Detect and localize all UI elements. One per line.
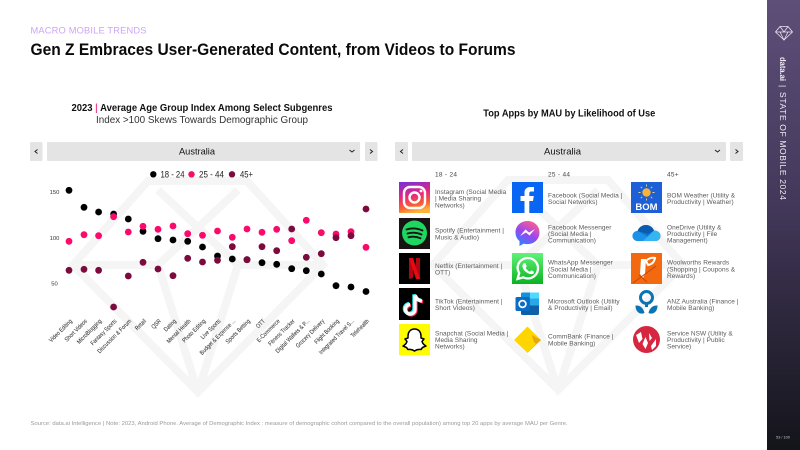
app: Netflix	[399, 253, 502, 284]
app: BOM Weather: BOM	[635, 202, 658, 213]
chart: 45+ series	[66, 206, 369, 310]
app: WhatsApp Messenger: (Social Media |	[548, 266, 592, 273]
eyebrow label: MACRO MOBILE TRENDS	[30, 26, 146, 36]
title: Gen Z Embraces User-Generated Content, from Videos to Forums	[30, 41, 516, 59]
chart: x axis labels: Budget & Expense ...	[199, 318, 238, 357]
right country selector: Australia	[544, 146, 582, 158]
column headers: 25 - 44	[548, 172, 570, 179]
chart heading: Index >100 Skews Towards Demographic Group	[96, 115, 308, 126]
chart: y axis labels: 50	[51, 282, 58, 288]
app: Facebook: Facebook (Social Media |	[548, 192, 623, 199]
chart: y axis labels: 100	[50, 236, 59, 242]
app: Facebook Messenger: Communication)	[548, 238, 596, 245]
chart: y axis labels	[50, 190, 59, 288]
background watermark: left gem	[73, 181, 323, 392]
app: Service NSW: Productivity | Public	[667, 337, 725, 344]
column headers	[435, 172, 679, 179]
chart: x axis labels: Fantasy Sports	[90, 318, 119, 347]
chart: x axis labels: Mental Health	[166, 318, 193, 345]
left country selector: Australia	[179, 146, 216, 158]
app: Service NSW	[633, 326, 733, 353]
app: CommBank	[514, 326, 614, 353]
app: CommBank: Mobile Banking)	[548, 340, 595, 347]
chart: x axis labels	[48, 318, 371, 357]
app: Facebook: Social Networks)	[548, 199, 598, 206]
chart: x axis labels: Grocery Delivery	[295, 318, 326, 350]
app: Instagram	[399, 182, 507, 213]
chart: x axis labels: Dating	[163, 318, 178, 333]
app: BOM Weather: Productivity | Weather)	[667, 199, 734, 206]
app: Spotify: Music & Audio)	[435, 234, 479, 241]
chart heading	[72, 103, 333, 126]
app: BOM Weather: BOM Weather (Utility &	[667, 192, 736, 199]
chart: x axis labels: Sports Betting	[225, 318, 252, 346]
app: OneDrive: Productivity | File	[667, 231, 718, 238]
app: Woolworths Rewards: Woolworths Rewards	[667, 260, 730, 267]
app: Woolworths Rewards: (Shopping | Coupons &	[667, 266, 736, 273]
app: Snapchat: Media Sharing	[435, 337, 478, 344]
column headers: 45+	[667, 172, 679, 179]
chart: x axis labels: MicroBlogging	[76, 318, 104, 346]
app: Facebook	[512, 182, 623, 213]
app: OneDrive	[632, 224, 722, 245]
app: OneDrive: Management)	[667, 238, 708, 245]
chart legend: 18 - 24	[160, 170, 184, 180]
app: Microsoft Outlook: Microsoft Outlook (Utility	[548, 298, 620, 305]
app: Microsoft Outlook: & Productivity | Email)	[548, 305, 613, 312]
chart legend: 45+	[240, 170, 253, 180]
chart: x axis labels: Discussion & Forum	[97, 318, 134, 355]
app: Instagram: Instagram (Social Media	[435, 189, 507, 196]
sidebar title: data.ai	[778, 57, 788, 81]
app: Snapchat	[399, 324, 509, 355]
chart: x axis labels: Fitness Tracker	[268, 318, 297, 348]
left country selector	[30, 142, 378, 161]
app: Spotify	[399, 218, 504, 249]
app: ANZ Australia: ANZ Australia (Finance |	[667, 298, 739, 305]
chart: x axis labels: QSR	[151, 318, 163, 331]
footnote: Source: data.ai Intelligence | Note: 2023, Android Phone. Average of Demographic Index : measure of demographic cohort compared to the overall population) among top 20 apps by average MAU per Genre.	[31, 421, 568, 427]
app: OneDrive: OneDrive (Utility &	[667, 224, 722, 231]
app: Netflix: Netflix (Entertainment |	[435, 263, 502, 270]
chart: x axis labels: E-Commerce	[256, 318, 282, 344]
app: WhatsApp Messenger: Communication)	[548, 273, 596, 280]
right country selector	[395, 142, 743, 161]
chart legend: 25 - 44	[199, 170, 224, 180]
chart: x axis labels: Telehealth	[350, 318, 371, 339]
chart: x axis labels: Video Editing	[48, 318, 74, 344]
app: TikTok: TikTok (Entertainment |	[435, 298, 503, 305]
app: Microsoft Outlook	[516, 292, 620, 315]
icon: sidebar gem logo	[776, 26, 792, 40]
app: WhatsApp Messenger: WhatsApp Messenger	[548, 260, 614, 267]
sidebar	[767, 0, 800, 450]
app: Instagram: | Media Sharing	[435, 196, 481, 203]
app: Service NSW: Service NSW (Utility &	[667, 330, 733, 337]
app: TikTok: Short Videos)	[435, 305, 475, 312]
chart: x axis labels: Photo Editing	[182, 318, 208, 344]
chart: x axis labels: Flight Booking	[314, 318, 341, 346]
background watermark: right gem	[433, 180, 683, 390]
chart: x axis labels: OTT	[255, 318, 267, 330]
sidebar title: STATE OF MOBILE 2024	[778, 92, 788, 200]
chart: x axis labels: Live Sports	[200, 318, 223, 341]
chart: x axis labels: Retail	[134, 318, 148, 332]
app: Woolworths Rewards: Rewards)	[667, 273, 695, 280]
chart: x axis labels: Digital Wallets & P...	[275, 318, 312, 355]
app: Instagram: Networks)	[435, 202, 465, 209]
app: ANZ Australia	[636, 292, 739, 314]
app: Service NSW: Service)	[667, 344, 691, 351]
app: BOM Weather	[631, 182, 736, 213]
app: Woolworths Rewards	[631, 253, 736, 284]
app: Snapchat: Snapchat (Social Media |	[435, 330, 509, 337]
chart: 25-44 series	[66, 213, 369, 251]
app: Spotify: Spotify (Entertainment |	[435, 228, 504, 235]
app: Netflix: OTT)	[435, 270, 450, 277]
app: CommBank: CommBank (Finance |	[548, 334, 614, 341]
column headers: 18 - 24	[435, 172, 457, 179]
app: WhatsApp Messenger	[512, 253, 614, 284]
chart: y axis labels: 150	[50, 190, 59, 196]
app: Snapchat: Networks)	[435, 344, 465, 351]
chart legend	[150, 170, 253, 180]
app: TikTok	[399, 288, 503, 320]
chart heading: 2023 | Average Age Group Index Among Select Subgenres	[72, 103, 333, 114]
chart: x axis labels: Short Videos	[64, 318, 89, 344]
app: Facebook Messenger: (Social Media |	[548, 231, 592, 238]
apps heading: Top Apps by MAU by Likelihood of Use	[483, 109, 656, 120]
sidebar title: |	[778, 85, 788, 87]
page number: 53 / 100	[776, 436, 790, 440]
chart: 18-24 series	[66, 187, 369, 295]
chart: x axis labels: Integrated Travel S...	[318, 318, 356, 356]
app: ANZ Australia: Mobile Banking)	[667, 305, 714, 312]
app: Facebook Messenger: Facebook Messenger	[548, 224, 612, 231]
app: Facebook Messenger	[516, 221, 612, 246]
